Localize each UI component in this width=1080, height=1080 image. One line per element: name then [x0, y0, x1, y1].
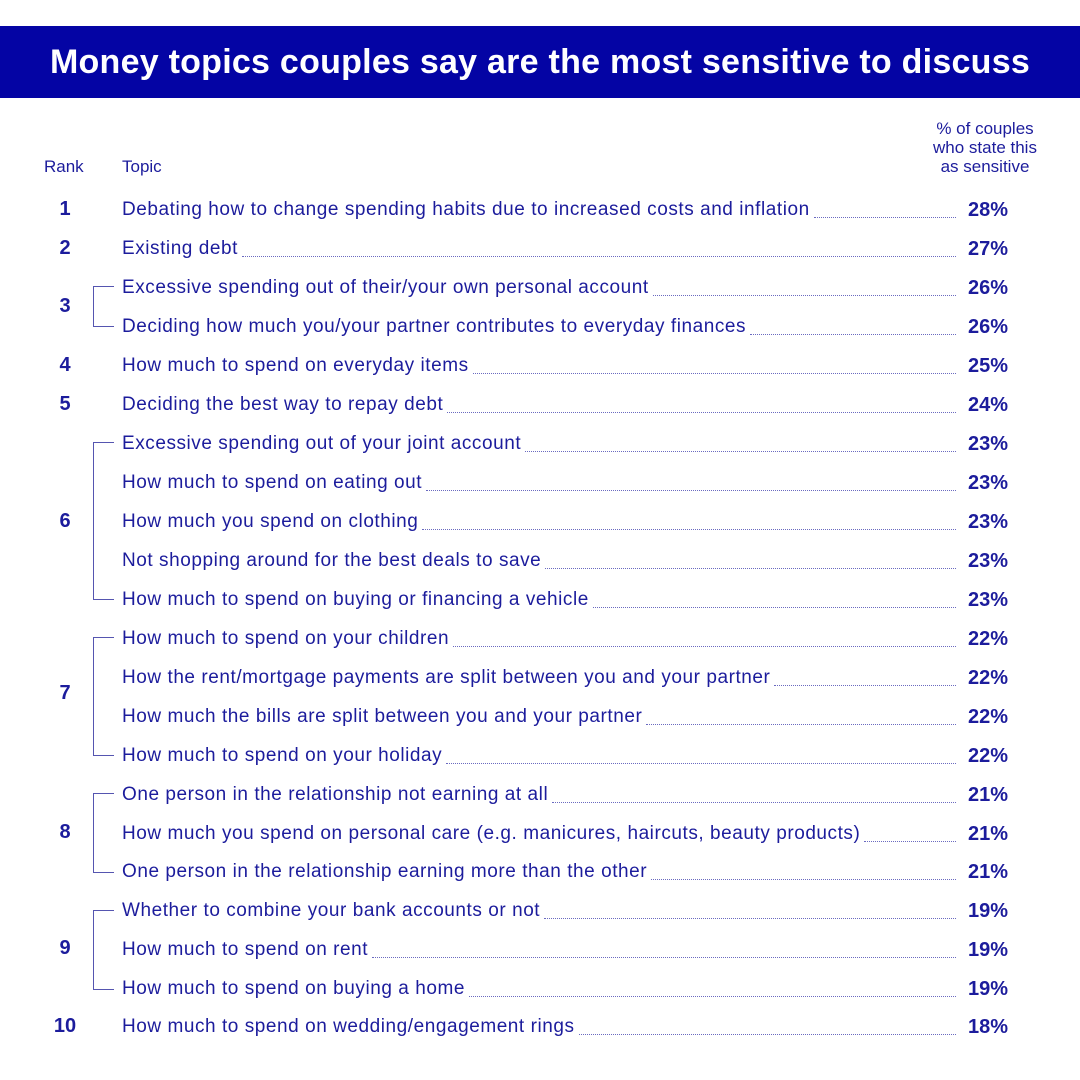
topic rows: One person in the relationship not earning at all [122, 784, 548, 805]
topic rows: 28% [968, 198, 1008, 220]
column header: topic: Topic [122, 157, 162, 176]
title: Money topics couples say are the most sensitive to discuss [50, 42, 1030, 80]
topic rows: 23% [968, 510, 1008, 532]
topic rows: 23% [968, 432, 1008, 454]
topic rows: 26% [968, 316, 1008, 338]
column header: percent: who state this [933, 138, 1037, 157]
topic rows: Deciding the best way to repay debt [122, 394, 443, 415]
topic rows: 24% [968, 394, 1008, 416]
topic rows: 23% [968, 472, 1008, 494]
rank numbers: 4 [59, 354, 71, 376]
topic rows: Not shopping around for the best deals to save [122, 550, 541, 571]
topic rows: How much to spend on your holiday [122, 745, 442, 766]
topic rows: How much you spend on personal care (e.g. manicures, haircuts, beauty products) [122, 823, 860, 844]
topic rows: 22% [968, 666, 1008, 688]
topic rows: 21% [968, 822, 1008, 844]
topic rows: 26% [968, 276, 1008, 298]
column header: percent [933, 119, 1037, 176]
rank numbers [54, 198, 76, 1037]
topic rows: Excessive spending out of your joint account [122, 433, 521, 454]
topic rows: 21% [968, 784, 1008, 806]
topic rows: 27% [968, 238, 1008, 260]
topic rows: Deciding how much you/your partner contributes to everyday finances [122, 316, 746, 337]
topic rows: How much to spend on buying or financing a vehicle [122, 589, 589, 610]
rank numbers: 3 [59, 295, 71, 317]
topic rows: 19% [968, 900, 1008, 922]
topic rows: How much the bills are split between you and your partner [122, 706, 642, 727]
column header: rank: Rank [44, 157, 84, 176]
topic rows: 22% [968, 706, 1008, 728]
topic rows: Whether to combine your bank accounts or not [122, 900, 540, 921]
topic rows: How much to spend on everyday items [122, 355, 469, 376]
topic rows: How much to spend on your children [122, 628, 449, 649]
rank numbers: 10 [54, 1015, 76, 1037]
topic rows: Excessive spending out of their/your own personal account [122, 277, 649, 298]
rank numbers: 6 [59, 510, 71, 532]
rank numbers: 1 [59, 198, 71, 220]
topic rows: How the rent/mortgage payments are split between you and your partner [122, 667, 770, 688]
rank numbers: 9 [59, 937, 71, 959]
topic rows: How much to spend on eating out [122, 472, 422, 493]
topic rows: How much to spend on rent [122, 939, 368, 960]
topic rows: How much to spend on wedding/engagement rings [122, 1016, 575, 1037]
column header: percent: as sensitive [941, 157, 1029, 176]
topic rows: Existing debt [122, 238, 238, 259]
topic rows: 22% [968, 628, 1008, 650]
topic rows: How much to spend on buying a home [122, 978, 465, 999]
topic rows: 22% [968, 744, 1008, 766]
topic rows: 19% [968, 938, 1008, 960]
topic rows: One person in the relationship earning more than the other [122, 861, 647, 882]
topic rows: 23% [968, 588, 1008, 610]
rank numbers: 8 [59, 821, 71, 843]
topic rows: 23% [968, 550, 1008, 572]
rank numbers: 5 [59, 393, 71, 415]
title [0, 26, 1080, 98]
topic rows: 19% [968, 978, 1008, 1000]
topic rows: How much you spend on clothing [122, 511, 418, 532]
group brackets [93, 286, 114, 990]
topic rows: 18% [968, 1016, 1008, 1038]
column header: percent: % of couples [936, 119, 1034, 138]
rank numbers: 2 [59, 237, 71, 259]
topic rows: 21% [968, 860, 1008, 882]
rank numbers: 7 [59, 682, 71, 704]
topic rows: 25% [968, 354, 1008, 376]
topic rows: Debating how to change spending habits due to increased costs and inflation [122, 199, 810, 220]
